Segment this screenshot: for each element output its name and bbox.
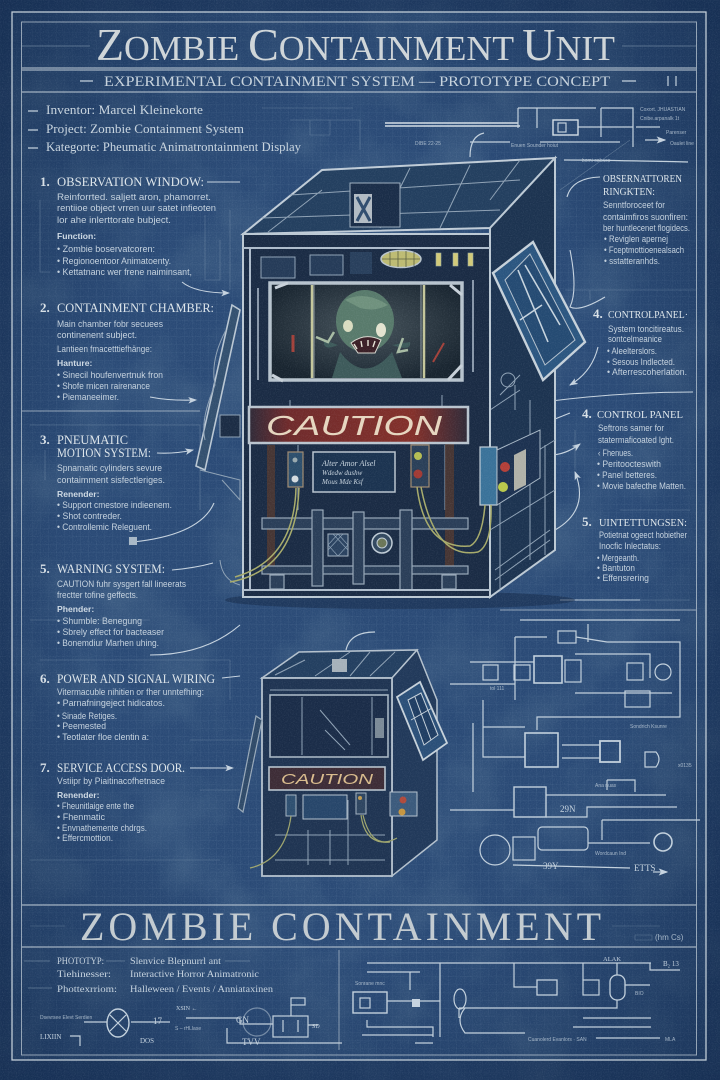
instruction note: Wdedw dushw [322, 469, 363, 477]
heading: 2. [40, 300, 50, 315]
lower right schematic: 29N [560, 804, 576, 814]
callout arrows [133, 177, 693, 768]
background drafting lines [30, 130, 696, 860]
project info: Kategorte: Pheumatic Animatrontainment Display [46, 140, 302, 154]
body: • Bonemdiur Marhen uhing. [57, 638, 159, 648]
heading: SERVICE ACCESS DOOR. [57, 761, 185, 775]
heading: OBSERNATTOREN [603, 173, 682, 185]
instruction note [313, 452, 395, 492]
title side marks [30, 926, 684, 942]
bottom left schematic: SD [312, 1024, 320, 1030]
wiring [230, 487, 491, 582]
top schematic: Cnibe.arpanalk 1t [640, 116, 680, 122]
heading: 7. [40, 760, 50, 775]
top schematic: Enuen Sounder hoiut [511, 143, 559, 149]
body: • Controllemic Releguent. [57, 522, 152, 532]
body: • Sbrely effect for bacteaser [57, 627, 164, 637]
body: • Fceptmottioenealsach [604, 245, 684, 255]
subtitle dashes [80, 76, 676, 86]
heading: 6. [40, 671, 50, 686]
body [57, 463, 172, 532]
zombie [316, 290, 410, 378]
bottom left schematic [40, 998, 342, 1047]
body: • Teotlater floe clentin a: [57, 732, 149, 742]
project info: Inventor: Marcel Kleinekorte [46, 103, 203, 117]
bottom left schematic: TVV [242, 1037, 261, 1047]
small controls [286, 792, 417, 819]
lower vent and gauge [328, 533, 392, 556]
body: • Envnathemente chdrgs. [57, 823, 147, 833]
bottom left schematic: Dsevrsee Elevt Serdien [40, 1015, 92, 1021]
top schematic: Parenser [666, 130, 687, 136]
machine shadow [225, 591, 575, 609]
roof [243, 158, 555, 234]
side control box [480, 430, 540, 505]
prototype info [24, 956, 274, 994]
small caution sign: CAUTION [281, 771, 373, 788]
prototype info: Slenvice Blepnurrl ant [130, 956, 222, 966]
body: CAUTION fuhr sysgert fall lineerats [57, 579, 187, 589]
body: statermaficoated lght. [598, 435, 674, 445]
title side rules [22, 45, 696, 47]
body: Main chamber fobr secuees [57, 319, 164, 329]
panel: service access door [40, 760, 185, 843]
title side marks: (hm Cs) [655, 933, 684, 942]
heading: POWER AND SIGNAL WIRING [57, 672, 215, 686]
small caution sign [269, 767, 385, 790]
body: • Effensrering [597, 573, 649, 583]
lower right schematic: Ana nuas [595, 783, 617, 789]
lower right schematic: tol 111 [490, 686, 504, 692]
base rail [243, 589, 490, 591]
body [607, 324, 687, 377]
bottom right schematic: Cuanolerd Evanlors · SAN [528, 1037, 587, 1043]
lower right schematic: Wordcaun Ind [595, 851, 626, 857]
body: • Fheunitlaige ente the [57, 801, 134, 811]
body: • Sinade Retiges. [57, 711, 117, 721]
panel: uintettungsen [582, 514, 687, 583]
body: Vstiipr by Piaitinacofhetnace [57, 776, 165, 786]
body [597, 530, 687, 583]
small front [262, 678, 392, 876]
body: ‹ Fhenues. [598, 448, 633, 458]
bottom left schematic: XSIN ← [176, 1006, 198, 1012]
body: Seftrons samer for [598, 423, 664, 433]
prototype info: Halleween / Events / Anniataxinen [130, 984, 274, 994]
subtitle: EXPERIMENTAL CONTAINMENT SYSTEM — PROTOTYPE CONCEPT [104, 74, 610, 90]
body: Lantieen fmacetttiefhänge: [57, 344, 152, 354]
main machine [196, 158, 575, 609]
small side [392, 650, 437, 876]
body [57, 319, 164, 402]
body: • Peritoocteswith [597, 459, 661, 469]
roof hatch [350, 183, 400, 227]
bolted rails [262, 510, 468, 590]
project info: Project: Zombie Containment System [46, 122, 244, 136]
body: Function: [57, 231, 96, 241]
bottom right schematic: ALAK [603, 956, 621, 963]
caution sign [249, 407, 468, 443]
bottom left schematic: GN [236, 1015, 249, 1025]
body: Senntforoceet for [603, 200, 665, 210]
body: • Sesous Indlected. [607, 357, 675, 367]
heading: 1. [40, 174, 50, 189]
body: Hanture: [57, 358, 92, 368]
heading: CONTAINMENT CHAMBER: [57, 301, 214, 315]
connector [346, 632, 375, 650]
observation window with zombie [270, 283, 462, 381]
heading: 4. [593, 306, 603, 321]
side rods [258, 280, 473, 380]
panel: right observation notes [603, 173, 690, 266]
small machine [238, 632, 447, 876]
heading: OBSERVATION WINDOW: [57, 175, 204, 189]
body: • Shumble: Benegung [57, 616, 142, 626]
small left strip [238, 716, 262, 812]
heading: RINGKTEN: [603, 186, 655, 198]
bottom right schematic: Sonrane mnc [355, 981, 385, 987]
panel: power and signal wiring [40, 671, 215, 742]
bottom left schematic: DOS [140, 1037, 154, 1045]
small roof [262, 650, 417, 678]
heading [603, 173, 682, 198]
body: • Reviglen apernej [604, 234, 668, 244]
heading [40, 432, 151, 460]
body [57, 192, 216, 277]
top schematic: Oaulet line [670, 141, 694, 147]
left switch box [288, 452, 303, 487]
top schematic: Coxort. JHUASTIAN [640, 107, 686, 113]
body: ber huntlecenet flogidecs. [603, 223, 690, 233]
callout node [129, 537, 137, 545]
body: • Aleelterslors. [607, 346, 657, 356]
prototype info: Tiehinesser: [57, 969, 111, 979]
lower right schematic: x0135 [678, 763, 692, 769]
project info [28, 103, 302, 154]
small window [270, 695, 388, 757]
heading: CONTROL PANEL [597, 409, 683, 421]
small wiring [250, 815, 397, 868]
lower right schematic: ETTS [634, 863, 656, 873]
heading [582, 514, 687, 529]
panel: observation window [40, 174, 216, 277]
body: frectter tofine geffects. [57, 590, 138, 600]
panel: pneumatic motion system [40, 432, 172, 532]
lower right schematic: Sondrich Ksunre [630, 724, 667, 730]
heading: 5. [40, 561, 50, 576]
bottom title: ZOMBIE CONTAINMENT [80, 904, 601, 949]
heading: 5. [582, 514, 592, 529]
right side panel [490, 158, 555, 597]
bottom right schematic: BIO [635, 991, 644, 997]
instruction note: Mous Mde Ksf [321, 478, 364, 486]
body: • Kettatnanc wer frene naiminsant, [57, 267, 192, 277]
lower right schematic [450, 620, 700, 873]
panel: control panel lower [582, 406, 686, 491]
body: sontcelmeanice [608, 334, 662, 344]
body: Inocfic Inlectatus: [599, 541, 661, 551]
small door [397, 682, 447, 760]
bottom right schematic [353, 956, 680, 1043]
panel: control panel upper [593, 306, 688, 377]
top instrument panels [261, 252, 372, 278]
body: • Parnafningeject hidicatos. [57, 698, 165, 708]
body [603, 200, 690, 266]
body: Spnamatic cylinders sevure [57, 463, 162, 473]
top schematic [262, 107, 694, 164]
caution sign: CAUTION [266, 410, 443, 441]
prototype info: Interactive Horror Animatronic [130, 969, 259, 979]
heading: MOTION SYSTEM: [57, 446, 151, 460]
heading: PNEUMATIC [57, 433, 128, 447]
body: • Mergeanth. [597, 553, 639, 563]
bottom left schematic: S ‒ rHLlase [175, 1026, 201, 1032]
bottom left schematic: 17 [153, 1016, 162, 1026]
body: • Panel betteres. [597, 470, 657, 480]
top schematic: bomi cabaco [582, 158, 611, 164]
top schematic: DIBE 22-25 [415, 141, 441, 147]
bottom right schematic: MLA [665, 1037, 676, 1043]
body: • Effercmottion. [57, 833, 113, 843]
body [57, 776, 165, 843]
prototype info: Phottexrriom: [57, 984, 117, 994]
warning lamp [381, 250, 421, 268]
body [597, 423, 686, 491]
body: • Support cmestore indieenem. [57, 500, 172, 510]
heading: 4. [582, 406, 592, 421]
panel: containment chamber [40, 300, 214, 402]
body [57, 687, 204, 742]
panel: warning system [40, 561, 187, 648]
body: • Zombie boservatcoren: [57, 244, 155, 254]
body: lor ahe inlerttorate bubject. [57, 215, 171, 225]
body: • Piemaneeimer. [57, 392, 119, 402]
lower right schematic: 39Y [543, 861, 559, 871]
body: • Shofe rnicen rairenance [57, 381, 150, 391]
body: • sstatteranhds. [604, 256, 660, 266]
service door [493, 242, 585, 380]
body: Renender: [57, 790, 100, 800]
bottom right schematic: B₂ 13 [663, 960, 679, 968]
fuses [436, 253, 473, 266]
body: Vitermacuble nihitien or fher unntefhing: [57, 687, 204, 697]
body [57, 579, 187, 648]
heading: UINTETTUNGSEN: [599, 517, 687, 529]
front cabinet [243, 234, 490, 597]
body: Potietnat ogeect hobiether [599, 530, 687, 540]
left hinged panel [196, 305, 240, 585]
heading [582, 406, 683, 421]
body: • Peemested [57, 721, 106, 731]
prototype info: PHOTOTYP: [57, 956, 104, 966]
body: contaimment sisfectleriges. [57, 475, 165, 485]
right indicator box [411, 445, 429, 487]
bottom left schematic: LIXIIN [40, 1033, 61, 1041]
body: Phender: [57, 604, 94, 614]
heading [593, 306, 688, 321]
body: Reinforrted. saljett aron, phamorret. [57, 192, 211, 202]
body: contaimfiros suonfiren: [603, 212, 688, 222]
body: • Afterrescoherlation. [607, 367, 687, 377]
heading: CONTROLPANEL· [608, 309, 688, 321]
body: • Bantuton [597, 563, 635, 573]
body: • Regionoentoor Animatoenty. [57, 256, 171, 266]
heading: 3. [40, 432, 50, 447]
body: • Movie bafecthe Matten. [597, 481, 686, 491]
body: • Shot contreder. [57, 511, 122, 521]
body: rentiioe object vrren uur satet infieoten [57, 203, 216, 213]
body: continenent subject. [57, 330, 137, 340]
heading: WARNING SYSTEM: [57, 562, 165, 576]
instruction note: Alter Amor Alsel [321, 459, 376, 468]
body: System toncitireatus. [608, 324, 684, 334]
body: Renender: [57, 489, 100, 499]
title: ZOMBIE CONTAINMENT UNIT [96, 20, 615, 70]
body: • Fhenmatic [57, 812, 106, 822]
body: • Sinecil houfenvertnuk fron [57, 370, 163, 380]
